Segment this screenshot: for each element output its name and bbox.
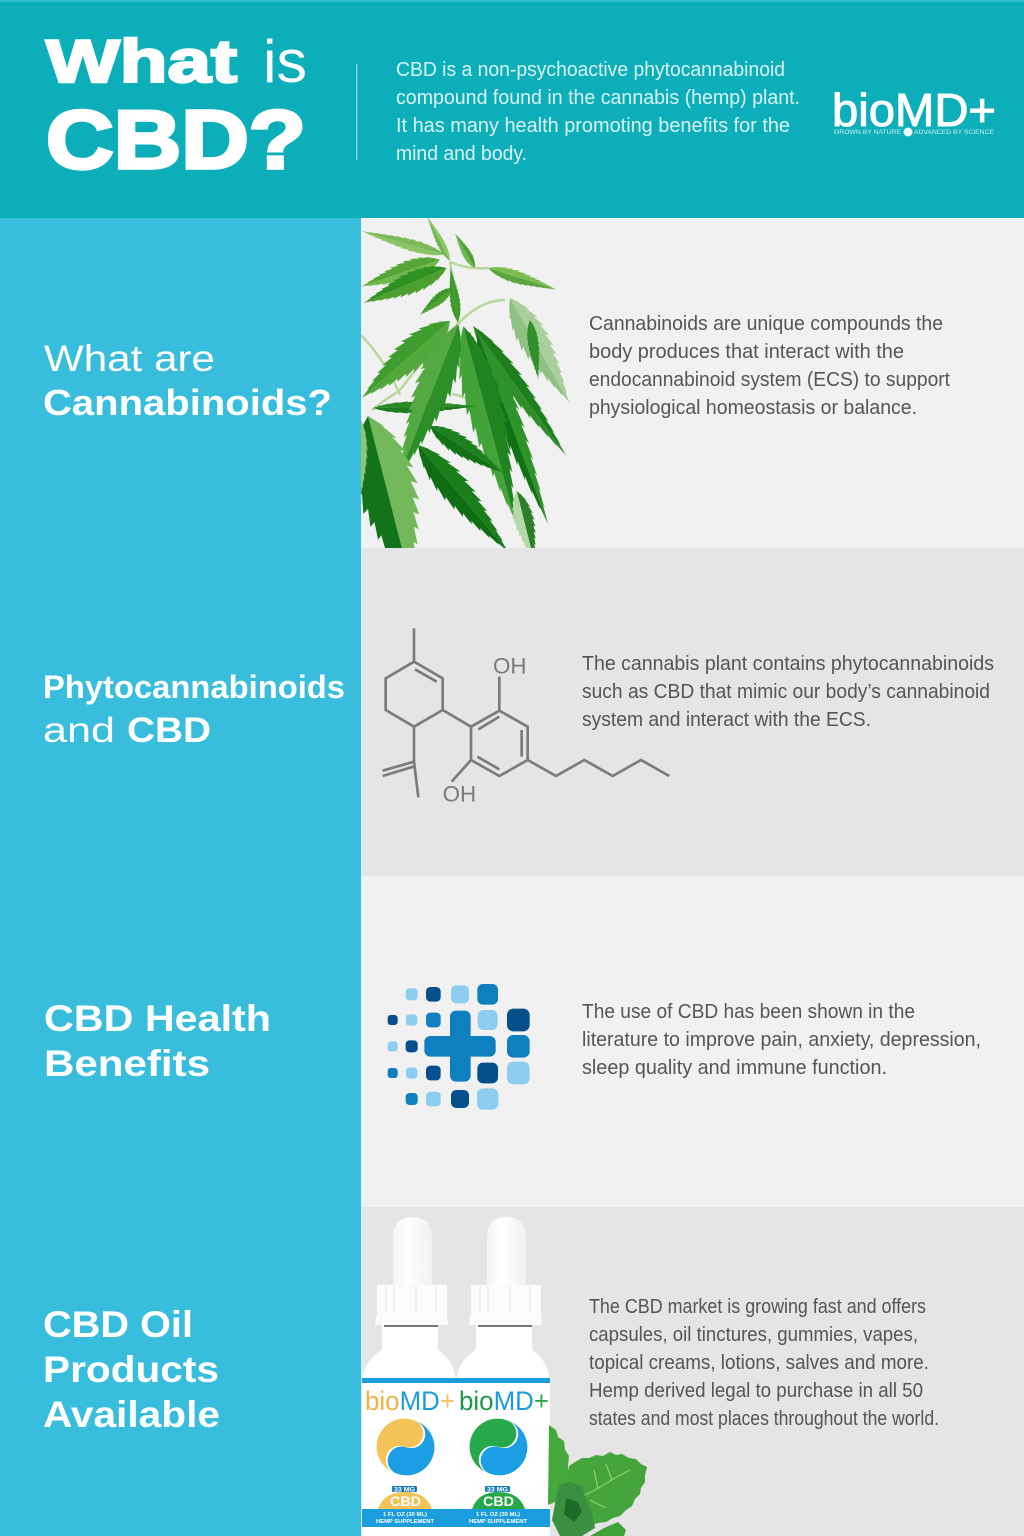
bottle: green variant: bioMD+	[459, 1386, 549, 1416]
left column	[0, 218, 361, 1536]
icon: gold yin-yang leaf	[369, 1411, 442, 1483]
chart: CBD molecule: OH	[493, 654, 526, 679]
header band	[0, 0, 1024, 218]
bottle: green variant: HEMP SUPPLEMENT	[469, 1519, 528, 1525]
heading: CBD Health Benefits: CBD Health	[44, 998, 271, 1039]
intro text: CBD is a non-psychoactive phytocannabinoid	[396, 59, 785, 81]
title: is	[263, 28, 307, 95]
bottle: gold variant: CBD	[390, 1493, 421, 1509]
heading: CBD Oil Products Available: Products	[43, 1349, 219, 1390]
heading: Phytocannabinoids and CBD: Phytocannabinoids	[43, 669, 345, 705]
heading: Phytocannabinoids and CBD: and	[43, 711, 115, 750]
heading: CBD Health Benefits	[44, 998, 271, 1084]
bottle: green variant: 1 FL OZ (30 ML)	[476, 1512, 520, 1518]
text: cannabinoids: body produces that interact with the	[589, 341, 904, 363]
heading: CBD Health Benefits: Benefits	[44, 1043, 210, 1084]
text: phytocannabinoids: The cannabis plant contains phytocannabinoids	[582, 653, 994, 675]
text: phytocannabinoids: system and interact with the ECS.	[582, 709, 871, 731]
title: What	[46, 28, 237, 95]
bottle: green variant: 33 MG	[487, 1488, 508, 1494]
bottle: green variant: CBD	[483, 1493, 514, 1509]
text: CBD market: capsules, oil tinctures, gummies, vapes,	[589, 1324, 918, 1346]
text: phytocannabinoids	[582, 653, 994, 731]
heading: CBD Oil Products Available: CBD Oil	[43, 1304, 193, 1345]
text: CBD market: Hemp derived legal to purchase in all 50	[589, 1380, 923, 1402]
icon: medical cross of blue squares	[388, 984, 530, 1110]
text: CBD market: topical creams, lotions, salves and more.	[589, 1352, 929, 1374]
text: health benefits	[582, 1001, 981, 1079]
heading: CBD Oil Products Available: Available	[43, 1394, 220, 1435]
chart: CBD molecule	[383, 628, 669, 806]
text: health benefits: The use of CBD has been shown in the	[582, 1001, 915, 1023]
text: phytocannabinoids: such as CBD that mimic our body’s cannabinoid	[582, 681, 990, 703]
heading: What are Cannabinoids?	[43, 338, 332, 423]
text: health benefits: literature to improve pain, anxiety, depression,	[582, 1029, 981, 1051]
panel: cannabis plant image	[361, 218, 570, 548]
text: health benefits: sleep quality and immune function.	[582, 1057, 887, 1079]
text: cannabinoids	[589, 313, 950, 419]
text: CBD market	[589, 1296, 939, 1430]
logo: bioMD+: ADVANCED BY SCIENCE	[914, 130, 994, 136]
logo: bioMD+: GROWN BY NATURE	[834, 130, 901, 136]
intro text: compound found in the cannabis (hemp) plant.	[396, 87, 800, 109]
title	[46, 28, 307, 186]
heading: Phytocannabinoids and CBD: CBD	[127, 711, 211, 750]
bottle: gold variant	[362, 1217, 456, 1536]
text: cannabinoids: endocannabinoid system (ECS) to support	[589, 369, 950, 391]
text: CBD market: states and most places throughout the world.	[589, 1408, 939, 1430]
text: cannabinoids: physiological homeostasis or balance.	[589, 397, 917, 419]
bottle: green variant	[456, 1217, 550, 1536]
heading: What are Cannabinoids?: Cannabinoids?	[43, 382, 332, 423]
icon: mint leaves	[548, 1425, 647, 1536]
heading: CBD Oil Products Available	[43, 1304, 220, 1435]
icon: green yin-yang leaf	[462, 1411, 535, 1483]
text: CBD market: The CBD market is growing fast and offers	[589, 1296, 926, 1318]
intro text: It has many health promoting benefits for the	[396, 115, 790, 137]
chart: CBD molecule: OH	[443, 781, 476, 806]
intro text	[396, 59, 800, 165]
title: CBD?	[46, 93, 306, 186]
intro text: mind and body.	[396, 143, 527, 165]
bottle: gold variant: 1 FL OZ (30 ML)	[383, 1512, 427, 1518]
heading: What are Cannabinoids?: What are	[44, 338, 215, 379]
bottle: gold variant: 33 MG	[394, 1488, 415, 1494]
bottle: gold variant: bioMD+	[365, 1386, 455, 1416]
logo: bioMD+: bioMD+	[832, 84, 996, 136]
bottle: gold variant: HEMP SUPPLEMENT	[376, 1519, 435, 1525]
text: cannabinoids: Cannabinoids are unique compounds the	[589, 313, 943, 335]
heading: Phytocannabinoids and CBD	[43, 669, 345, 750]
